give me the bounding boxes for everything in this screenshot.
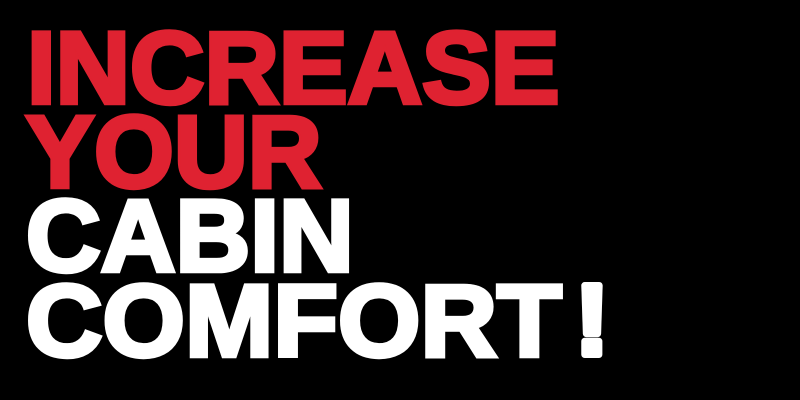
line: INCREASE: INCREASE xyxy=(27,10,560,125)
line: COMFORT: COMFORT xyxy=(26,263,562,378)
headline: cabin comfort xyxy=(26,178,609,378)
line: CABIN: CABIN xyxy=(26,178,354,293)
headline: increase your xyxy=(26,10,560,209)
line: YOUR: YOUR xyxy=(26,94,322,209)
exclamation mark: ! xyxy=(575,264,609,376)
